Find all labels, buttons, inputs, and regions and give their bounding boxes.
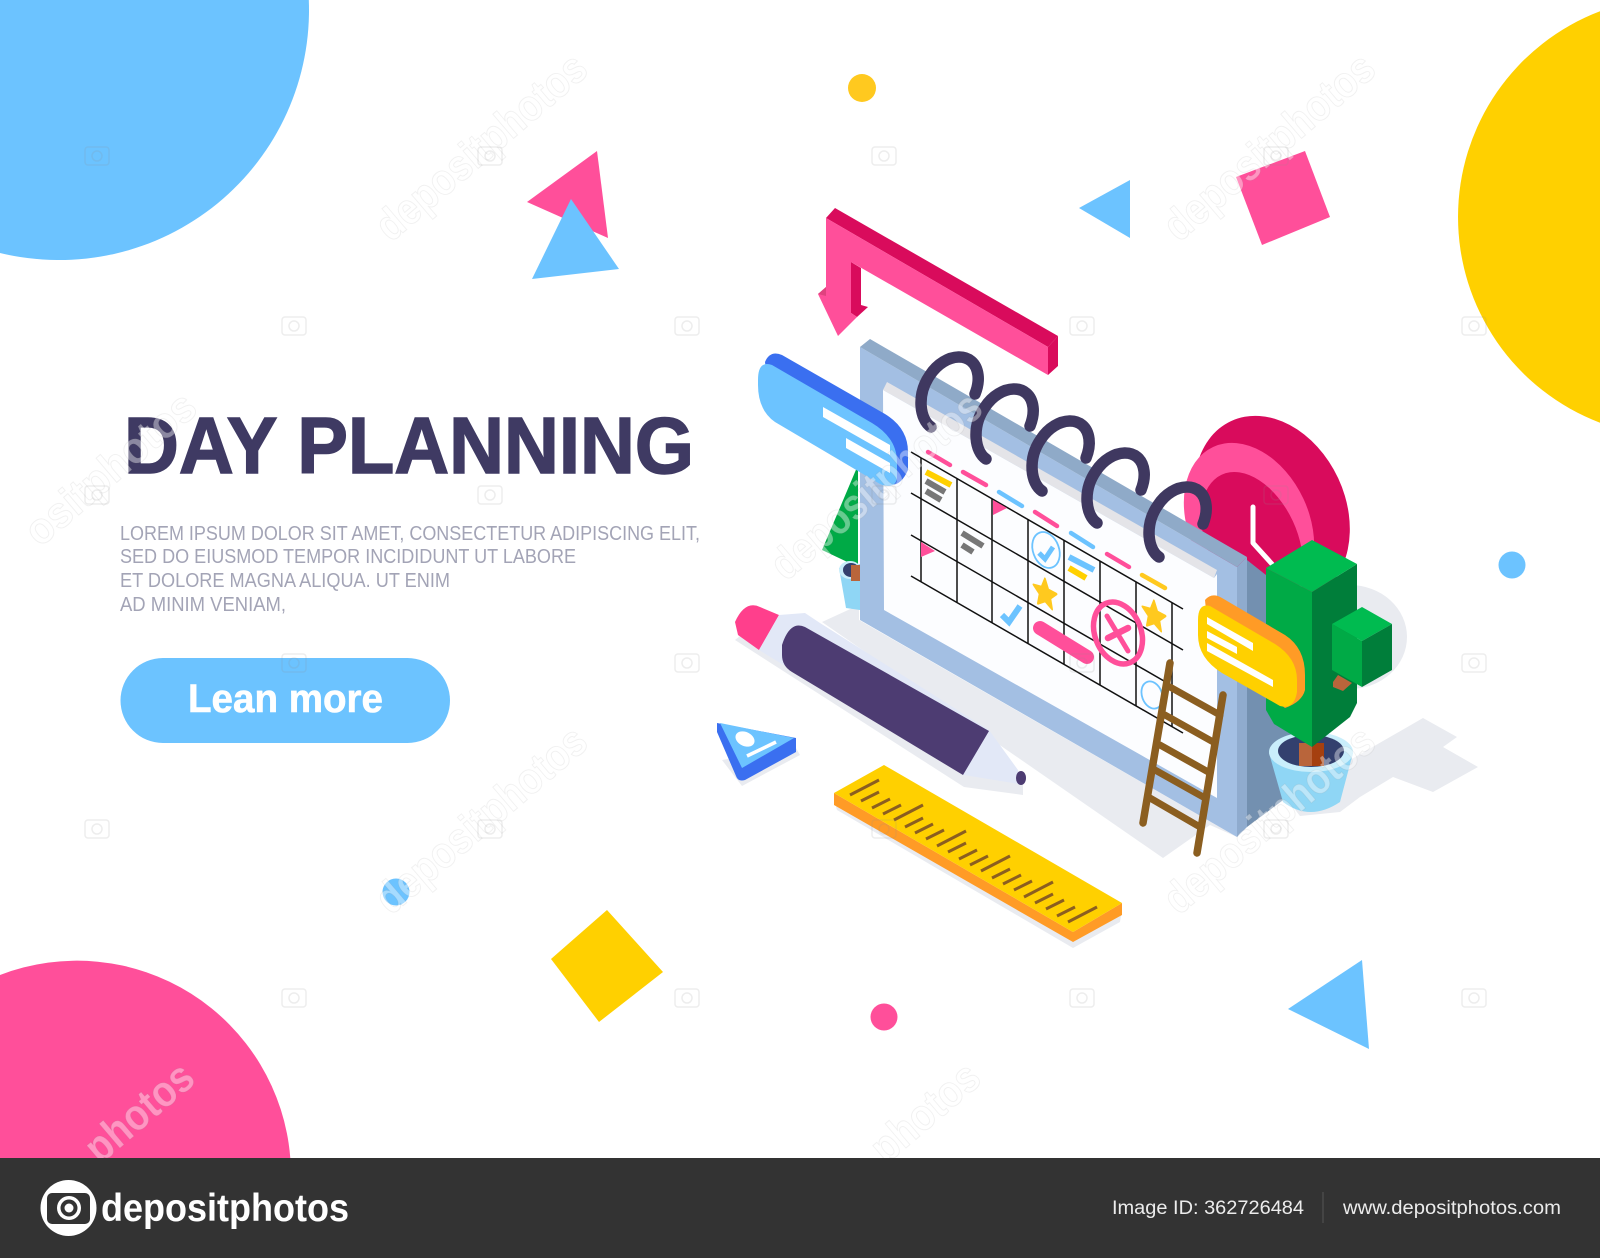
stock photo watermarks: depositphotos (366, 43, 597, 251)
body text: ET DOLORE MAGNA ALIQUA. UT ENIM (120, 570, 450, 592)
footer logo icon (40, 1180, 96, 1236)
body text: AD MINIM VENIAM, (120, 594, 286, 616)
blue speech bubble (758, 354, 908, 486)
background circle: yellow right (1458, 11, 1600, 423)
calendar page (883, 382, 1217, 578)
footer logo wordmark: depositphotos (101, 1187, 349, 1230)
stock photo watermarks: depositphotos (1154, 43, 1385, 251)
footer bar (0, 1158, 1600, 1258)
calendar board (860, 339, 1310, 837)
stock photo watermarks: photos (75, 1052, 204, 1173)
body text: LOREM IPSUM DOLOR SIT AMET, CONSECTETUR ADIPISCING ELIT, (120, 523, 700, 545)
illustration: isometric calendar scene (717, 208, 1478, 948)
clock (1159, 390, 1379, 628)
body text: SED DO EIUSMOD TEMPOR INCIDIDUNT UT LABORE (120, 546, 576, 568)
calendar day headers (928, 452, 1165, 588)
calendar grid (911, 452, 1183, 733)
blue triangle badge (717, 723, 796, 780)
website url: www.depositphotos.com (1342, 1198, 1561, 1219)
stock photo watermarks: depositphotos (1154, 716, 1385, 924)
stock photo watermarks: ositphotos (15, 382, 206, 556)
stock photo watermarks: depositphotos (366, 716, 597, 924)
image id: Image ID: 362726484 (1112, 1198, 1304, 1219)
left potted tree (822, 465, 861, 610)
title: DAY PLANNING (124, 401, 694, 490)
ladder (1143, 663, 1223, 853)
stock photo watermarks: depositphotos (761, 382, 992, 590)
right potted tree (1266, 540, 1392, 812)
spiral binding rings (921, 357, 1206, 557)
background circle: pink bottom left (0, 961, 290, 1158)
marker pen (735, 605, 1026, 785)
yellow ruler (834, 765, 1122, 942)
yellow speech bubble (1198, 595, 1305, 708)
calendar marks: checks, stars, cross (1002, 528, 1166, 712)
button: learn more (120, 658, 450, 743)
red arrow (818, 208, 1058, 375)
background circle: blue top left (0, 0, 309, 260)
stock photo watermarks: photos (861, 1052, 990, 1173)
button: learn more: Lean more (188, 677, 383, 721)
body text (120, 523, 700, 616)
decorative confetti shapes (382, 74, 1526, 1049)
floor shadows (722, 585, 1478, 948)
calendar cell notes (921, 472, 1094, 578)
